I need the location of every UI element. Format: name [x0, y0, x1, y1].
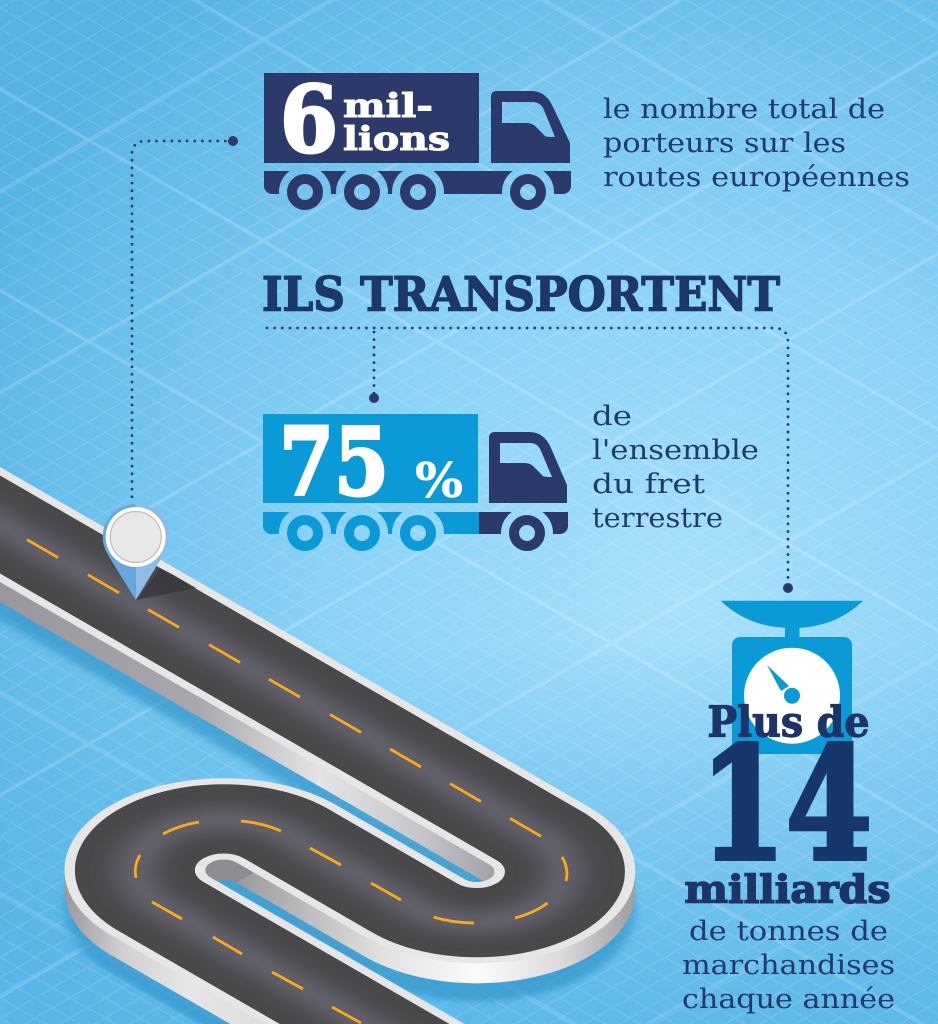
connector dot	[228, 136, 238, 146]
connector dot	[783, 583, 793, 593]
scale body	[732, 637, 852, 754]
description: marchandises	[682, 950, 895, 981]
truck box	[264, 73, 479, 163]
plus de: Plus de	[708, 698, 870, 746]
truck chassis	[263, 512, 568, 534]
truck label: 75	[279, 408, 389, 518]
text: truck count: porteurs sur les	[603, 128, 846, 159]
truck: 6 millions	[260, 66, 580, 205]
text: freight share	[592, 401, 759, 534]
truck: 75 %	[260, 408, 579, 546]
text: tonnage	[682, 698, 895, 1015]
text: truck count	[603, 94, 910, 193]
description	[682, 916, 895, 1015]
truck wheels	[292, 179, 541, 205]
text: freight share: du fret	[592, 469, 705, 500]
truck chassis	[264, 171, 571, 194]
truck box	[263, 414, 478, 503]
scale dial	[744, 648, 840, 744]
text: freight share: de	[592, 401, 632, 432]
text: freight share: l'ensemble	[592, 435, 759, 466]
description: chaque année	[682, 984, 895, 1015]
road surface	[0, 462, 845, 1024]
truck label: lions	[343, 119, 450, 158]
scale needle	[767, 665, 789, 691]
truck label: 6	[280, 66, 338, 174]
road side walls	[0, 464, 860, 1024]
text: truck count: le nombre total de	[603, 94, 885, 125]
truck cab	[489, 432, 567, 503]
road	[0, 462, 860, 1024]
pin head	[106, 507, 166, 567]
truck cab	[491, 91, 570, 163]
connector dot	[369, 393, 379, 403]
map pin	[103, 504, 196, 600]
pin body	[103, 504, 136, 600]
scale dish	[721, 601, 863, 628]
dotted connector: trucks to road pin	[132, 141, 233, 497]
truck label: mil-	[343, 86, 433, 125]
scale stem	[785, 627, 800, 638]
truck label: %	[415, 453, 463, 509]
icon: weighing scale	[721, 601, 863, 754]
dotted connector: heading to second truck	[373, 332, 375, 396]
dotted connector: heading to scale	[267, 328, 788, 586]
heading: ILS TRANSPORTENT	[262, 268, 780, 322]
pin shadow	[136, 568, 196, 600]
milliards: milliards	[684, 866, 890, 912]
description: de tonnes de	[689, 916, 888, 947]
text: truck count: routes européennes	[603, 162, 910, 193]
road shadow	[0, 500, 845, 1024]
text: freight share: terrestre	[592, 503, 723, 534]
road centre dashes	[27, 540, 567, 1023]
big number: 14	[700, 712, 872, 896]
truck label	[280, 66, 450, 174]
truck wheels	[292, 520, 540, 546]
